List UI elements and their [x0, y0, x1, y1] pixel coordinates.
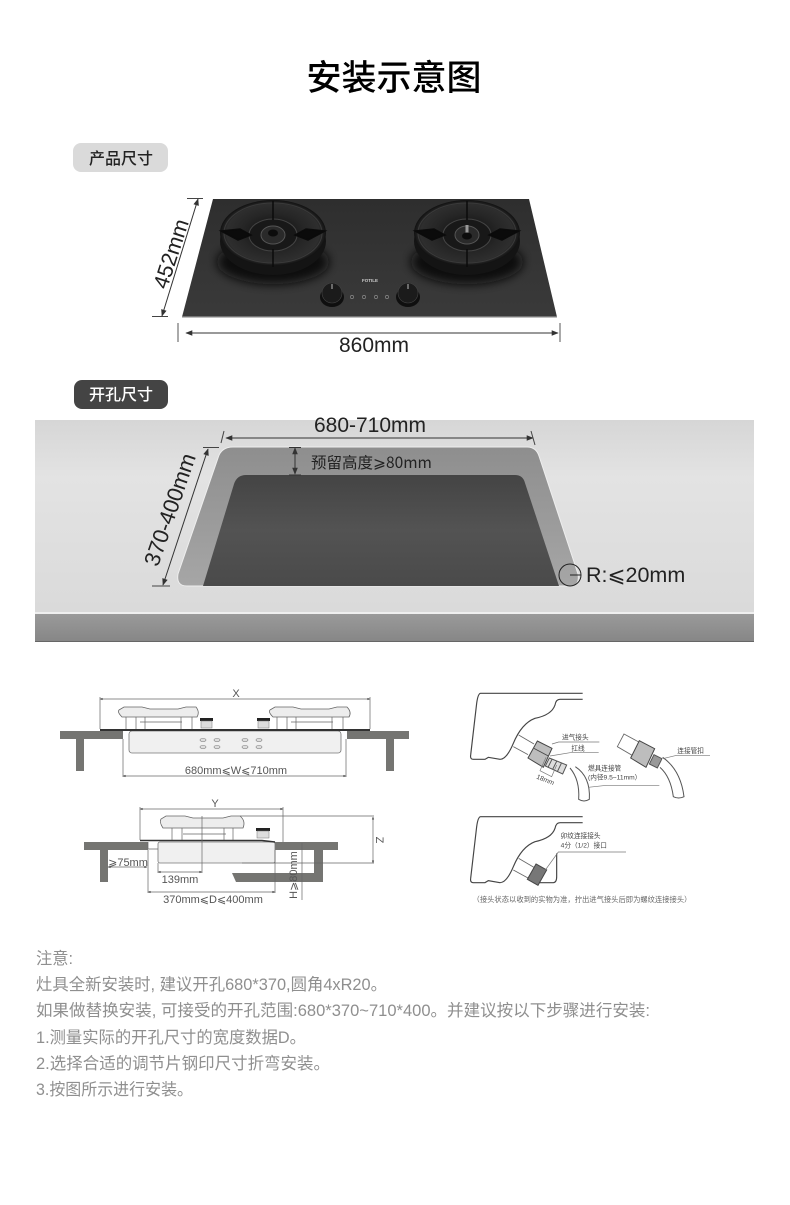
dimension 139mm [158, 816, 202, 886]
dimension Y [140, 798, 283, 842]
hose [660, 757, 684, 798]
hose [570, 767, 589, 801]
countertop front edge [35, 612, 754, 642]
opening outer wall [178, 447, 578, 586]
installation notes [36, 949, 650, 1099]
cutout figure: countertop opening [35, 414, 754, 642]
dimension W [123, 739, 346, 777]
nut [631, 741, 655, 767]
section label: product size: 产品尺寸 [89, 145, 153, 169]
dimension: reserved height: 预留高度⩾80mm [311, 451, 432, 473]
diagram: hose clamp connector [617, 734, 710, 798]
counter section [60, 731, 409, 771]
dimension H: H⩾80mm [288, 851, 300, 899]
left burner [217, 200, 329, 284]
dimension X: X [232, 688, 240, 700]
corner radius callout: R:⩽20mm [586, 563, 685, 587]
dimension Y: Y [211, 798, 219, 810]
dimension D [148, 850, 275, 906]
dimension 75mm: ⩾75mm [108, 857, 148, 869]
labels: 4分（1/2）接口 [561, 840, 607, 849]
counter section [84, 842, 338, 882]
dimension: depth 452mm [149, 198, 203, 316]
stove body outline [471, 817, 583, 883]
section label: product size [73, 143, 168, 172]
labels: 18mm [535, 774, 555, 787]
labels [561, 831, 607, 849]
dimension: depth 452mm: 452mm [149, 216, 194, 292]
diagram: gas connector with hose [471, 693, 659, 801]
labels: 燃具连接管 [588, 764, 622, 773]
installation notes: 2.选择合适的调节片钢印尺寸折弯安装。 [36, 1054, 330, 1073]
dimension Z [240, 816, 385, 863]
labels: 卯纹连接接头 [561, 831, 601, 840]
installation notes: 1.测量实际的开孔尺寸的宽度数据D。 [36, 1028, 306, 1047]
connector [513, 858, 534, 878]
opening floor [203, 475, 559, 586]
burner and knob [160, 816, 270, 840]
tube [617, 734, 640, 756]
dimension W: 680mm⩽W⩽710mm [185, 765, 287, 777]
dimension 139mm: 139mm [162, 874, 198, 886]
label: 连接管扣 [677, 745, 704, 755]
control knobs and touch buttons [320, 283, 420, 307]
diagram: side view depth [84, 798, 385, 906]
dimension D: 370mm⩽D⩽400mm [163, 894, 263, 906]
product figure: cooktop with dimensions [149, 198, 560, 357]
installation notes: 如果做替换安装, 可接受的开孔范围:680*370~710*400。并建议按以下步骤进行安装: [36, 1001, 650, 1020]
dimension: 680-710mm: 680-710mm [314, 414, 426, 437]
burners and knobs [118, 707, 350, 729]
labels: (内径9.5~11mm） [588, 772, 641, 781]
dimension Z: Z [373, 837, 385, 844]
countertop surface [35, 420, 754, 612]
installation notes: 3.按图所示进行安装。 [36, 1080, 193, 1099]
cooktop body [140, 840, 275, 863]
connector nut [513, 735, 567, 774]
installation notes: 灶具全新安装时, 建议开孔680*370,圆角4xR20。 [36, 975, 387, 994]
section label: cutout size [74, 380, 168, 409]
labels [535, 733, 641, 787]
dimension: 370-400mm: 370-400mm [139, 450, 201, 569]
cooktop glass panel [182, 199, 557, 317]
dimension X [100, 688, 370, 729]
right burner [411, 200, 523, 284]
title: 安装示意图 [306, 50, 482, 101]
diagram: threaded connector [471, 817, 626, 885]
dimension: 680-710mm [221, 414, 535, 445]
connector footnote: （接头状态以收到的实物为准，拧出进气接头后即为螺纹连接接头） [473, 895, 691, 905]
installation notes: 注意: [36, 949, 73, 968]
cooktop body [100, 729, 370, 753]
labels: 进气接头 [562, 733, 589, 742]
diagram: side view width [60, 688, 409, 777]
labels: 扛线 [571, 744, 585, 753]
section label: cutout size: 开孔尺寸 [89, 381, 153, 405]
dimension: width 860mm: 860mm [339, 334, 409, 357]
stove body outline [471, 693, 583, 759]
brand mark: FOTILE [362, 278, 378, 283]
dimension: 370-400mm [139, 448, 219, 586]
